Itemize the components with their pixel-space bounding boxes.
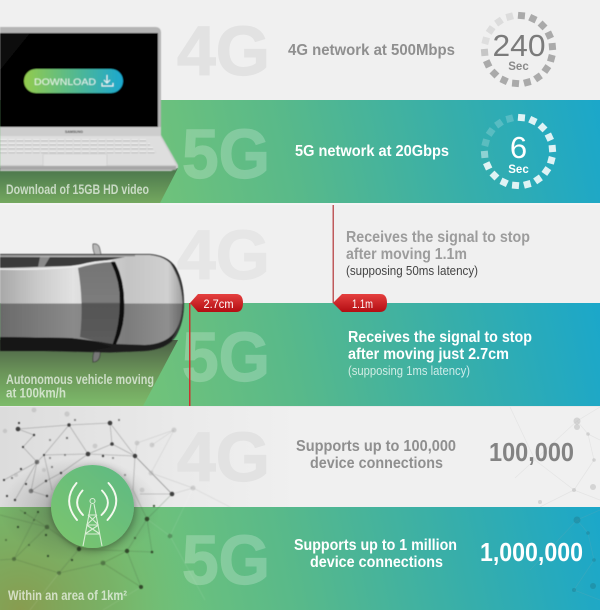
- panel: download speed: [0, 0, 600, 203]
- text: 5G connections: device connections: [310, 554, 443, 571]
- timer: 6 sec: Sec: [508, 164, 529, 176]
- label: 5G: 5G: [182, 115, 270, 193]
- label: 4G: 4G: [177, 12, 270, 90]
- marker line: 2.7cm: [189, 303, 190, 406]
- 4G band: download: [0, 0, 600, 100]
- caption: autonomous vehicle: Autonomous vehicle moving: [6, 371, 154, 387]
- icon: laptop with download button: [0, 27, 178, 171]
- text: 4G stopping distance: Receives the signal to stop: [346, 229, 530, 246]
- icon: laptop with download button: SAMSUNG: [65, 130, 83, 134]
- 5G band: vehicle: [0, 303, 600, 406]
- text: 5G stopping distance: after moving just 2.7cm: [348, 346, 509, 363]
- label: 4G: 4G: [177, 418, 270, 496]
- download button: [24, 69, 123, 93]
- timer: 6 sec: 6: [510, 130, 527, 165]
- mirrors: [93, 244, 102, 259]
- tag: 2.7cm: 2.7cm: [204, 299, 234, 311]
- number: 100,000: 100,000: [489, 437, 574, 467]
- 4G band: connections: [0, 407, 600, 507]
- 5G band: connections: [0, 507, 600, 610]
- tag: 2.7cm: [190, 294, 243, 312]
- side windows: [0, 257, 125, 268]
- timer: 6 sec: [481, 114, 556, 189]
- text: 4G stopping distance: [346, 229, 530, 278]
- panel: device connections: [0, 407, 600, 610]
- shadow around network: [0, 458, 160, 562]
- text: 4G stopping distance: (supposing 50ms latency): [346, 264, 478, 278]
- label: 5G: 5G: [182, 521, 270, 599]
- caption: autonomous vehicle: at 100km/h: [6, 384, 66, 400]
- label: 4G: 4G: [177, 216, 270, 294]
- timer: 240 sec: 240: [492, 28, 546, 63]
- divider: [0, 203, 600, 205]
- icon: car top view: [0, 244, 184, 362]
- text: 5G network speed: 5G network at 20Gbps: [295, 143, 449, 160]
- marker line: 1.1m: [332, 205, 334, 303]
- network graphic: left: [0, 408, 230, 610]
- text: 5G connections: [294, 537, 457, 571]
- tag: 1.1m: 1.1m: [352, 299, 373, 311]
- number: 1,000,000: 1,000,000: [480, 537, 583, 567]
- text: 5G stopping distance: [348, 329, 532, 378]
- icon: cell tower: [51, 465, 134, 548]
- text: 4G connections: device connections: [310, 455, 443, 472]
- text: 4G connections: [296, 438, 456, 472]
- caption: autonomous vehicle: [6, 371, 154, 400]
- caption: download: Download of 15GB HD video: [6, 181, 149, 197]
- timer: 240 sec: [481, 12, 556, 87]
- text: 5G stopping distance: Receives the signal to stop: [348, 329, 532, 346]
- olive shade: [0, 507, 230, 610]
- windshield: [78, 262, 120, 344]
- network graphic: right: [510, 407, 600, 600]
- upper network: [3, 408, 230, 507]
- panel: stopping distance: [0, 205, 600, 406]
- caption: area: Within an area of 1km²: [8, 588, 127, 603]
- label: 5G: 5G: [182, 318, 270, 396]
- timer: 240 sec: Sec: [508, 61, 529, 73]
- lower network: [0, 488, 205, 610]
- download button: DOWNLOAD: [34, 77, 97, 87]
- car shadow: [0, 340, 178, 406]
- text: 4G stopping distance: after moving 1.1m: [346, 246, 467, 263]
- text: 4G network speed: 4G network at 500Mbps: [288, 42, 455, 59]
- laptop shadow: [0, 168, 178, 203]
- 4G band: vehicle: [0, 205, 600, 303]
- divider: [0, 406, 600, 408]
- tag: 1.1m: [333, 294, 387, 312]
- text: 5G stopping distance: (supposing 1ms latency): [348, 364, 470, 378]
- 5G band: download: [0, 100, 600, 203]
- text: 5G connections: Supports up to 1 million: [294, 537, 457, 554]
- text: 4G connections: Supports up to 100,000: [296, 438, 456, 455]
- highlight line: [0, 261, 112, 269]
